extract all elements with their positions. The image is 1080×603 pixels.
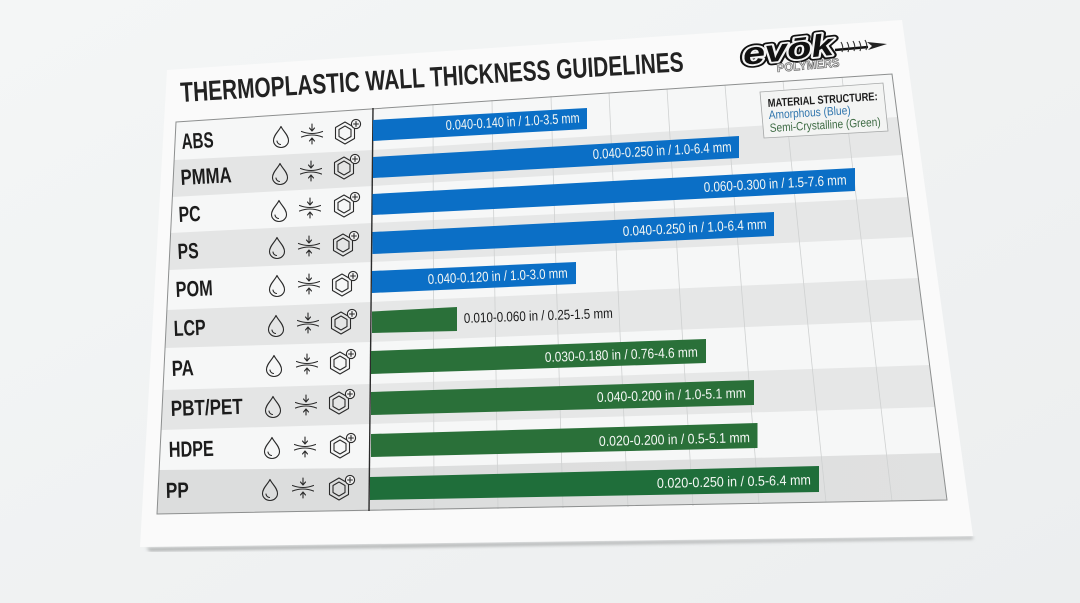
material label: ABS <box>181 127 214 154</box>
row bands: material side <box>157 150 373 514</box>
material label: PA <box>171 355 194 381</box>
bar <box>373 136 739 178</box>
row: PS <box>177 212 774 264</box>
bar <box>372 262 576 293</box>
icon: drop <box>274 126 288 148</box>
material label: LCP <box>173 315 206 341</box>
icon: molecule <box>332 309 357 334</box>
bar <box>371 339 706 374</box>
icon: molecule <box>330 433 356 458</box>
icon: compression <box>292 478 314 498</box>
icon: compression <box>298 236 320 256</box>
icon: compression <box>294 437 316 457</box>
bar <box>373 108 587 141</box>
legend: material structure: Amorphous (Blue) <box>768 103 851 122</box>
table background <box>157 74 947 514</box>
legend: material structure: MATERIAL STRUCTURE: <box>767 91 878 110</box>
value: 0.040-0.140 in / 1.0-3.5 mm <box>445 110 580 133</box>
row: HDPE <box>168 423 758 462</box>
icon: drop <box>272 164 288 184</box>
value: 0.040-0.250 in / 1.0-6.4 mm <box>622 216 767 239</box>
value: 0.060-0.300 in / 1.5-7.6 mm <box>703 172 847 195</box>
icon: molecule <box>332 271 358 296</box>
value: 0.020-0.200 in / 0.5-5.1 mm <box>599 429 750 449</box>
icon: compression <box>296 395 316 415</box>
icon: drop <box>264 438 280 458</box>
icon: molecule <box>336 119 361 144</box>
icon: compression <box>300 198 320 218</box>
row: POM <box>175 262 576 302</box>
icon: drop <box>266 356 282 376</box>
icon: compression <box>298 274 320 294</box>
icon: molecule <box>330 349 356 374</box>
material label: PMMA <box>180 162 232 190</box>
icon: drop <box>270 276 284 296</box>
row: PBT/PET <box>170 380 754 421</box>
legend: material structure <box>760 83 888 138</box>
row: PC <box>178 168 855 227</box>
bar <box>372 307 457 333</box>
bar <box>371 380 754 415</box>
logo: evok polymers: POLYMERS <box>776 56 840 75</box>
logo: evok polymers: evōk <box>741 27 837 72</box>
row bands: chart side <box>369 117 947 511</box>
bar <box>370 466 819 500</box>
value: 0.040-0.120 in / 1.0-3.0 mm <box>427 265 568 287</box>
table panel <box>157 74 947 514</box>
bar <box>372 212 774 254</box>
icon: compression <box>298 313 318 333</box>
row: PA <box>171 339 706 381</box>
icon: molecule <box>334 192 360 217</box>
logo: evok polymers: evōk <box>741 27 837 72</box>
logo: evok polymers: evōk <box>741 27 837 72</box>
icon: drop <box>272 200 286 222</box>
paper sheet <box>140 20 973 547</box>
title: THERMOPLASTIC WALL THICKNESS GUIDELINES <box>179 46 684 108</box>
material label: POM <box>175 275 213 302</box>
paper sheet shadow <box>146 537 973 551</box>
icon: drop <box>262 480 278 500</box>
material label: PC <box>178 201 201 227</box>
legend: material structure: Semi-Crystalline (Green) <box>769 115 881 135</box>
value: 0.040-0.250 in / 1.0-6.4 mm <box>592 139 732 162</box>
row: ABS <box>181 108 587 154</box>
material label: PS <box>177 238 199 264</box>
logo: evok polymers <box>741 27 887 75</box>
icon: drop <box>270 238 284 258</box>
material label: HDPE <box>168 436 214 462</box>
icon: molecule <box>334 231 359 256</box>
material label: PP <box>166 477 189 503</box>
value: 0.010-0.060 in / 0.25-1.5 mm <box>464 305 613 326</box>
icon: molecule <box>334 154 360 179</box>
icon: drop <box>266 396 280 418</box>
material label: PBT/PET <box>170 394 244 421</box>
icon: compression <box>296 354 318 374</box>
bar <box>371 423 758 457</box>
icon: compression <box>300 161 322 181</box>
icon: drop <box>268 316 284 336</box>
row: PMMA <box>180 136 739 190</box>
value: 0.040-0.200 in / 1.0-5.1 mm <box>597 385 746 405</box>
value: 0.020-0.250 in / 0.5-6.4 mm <box>657 472 811 491</box>
value: 0.030-0.180 in / 0.76-4.6 mm <box>545 344 698 365</box>
icon: compression <box>302 124 322 144</box>
row: PP <box>166 466 819 503</box>
row: LCP <box>173 305 613 341</box>
icon: molecule <box>330 389 355 414</box>
bar <box>372 168 855 215</box>
icon: molecule <box>330 475 355 500</box>
